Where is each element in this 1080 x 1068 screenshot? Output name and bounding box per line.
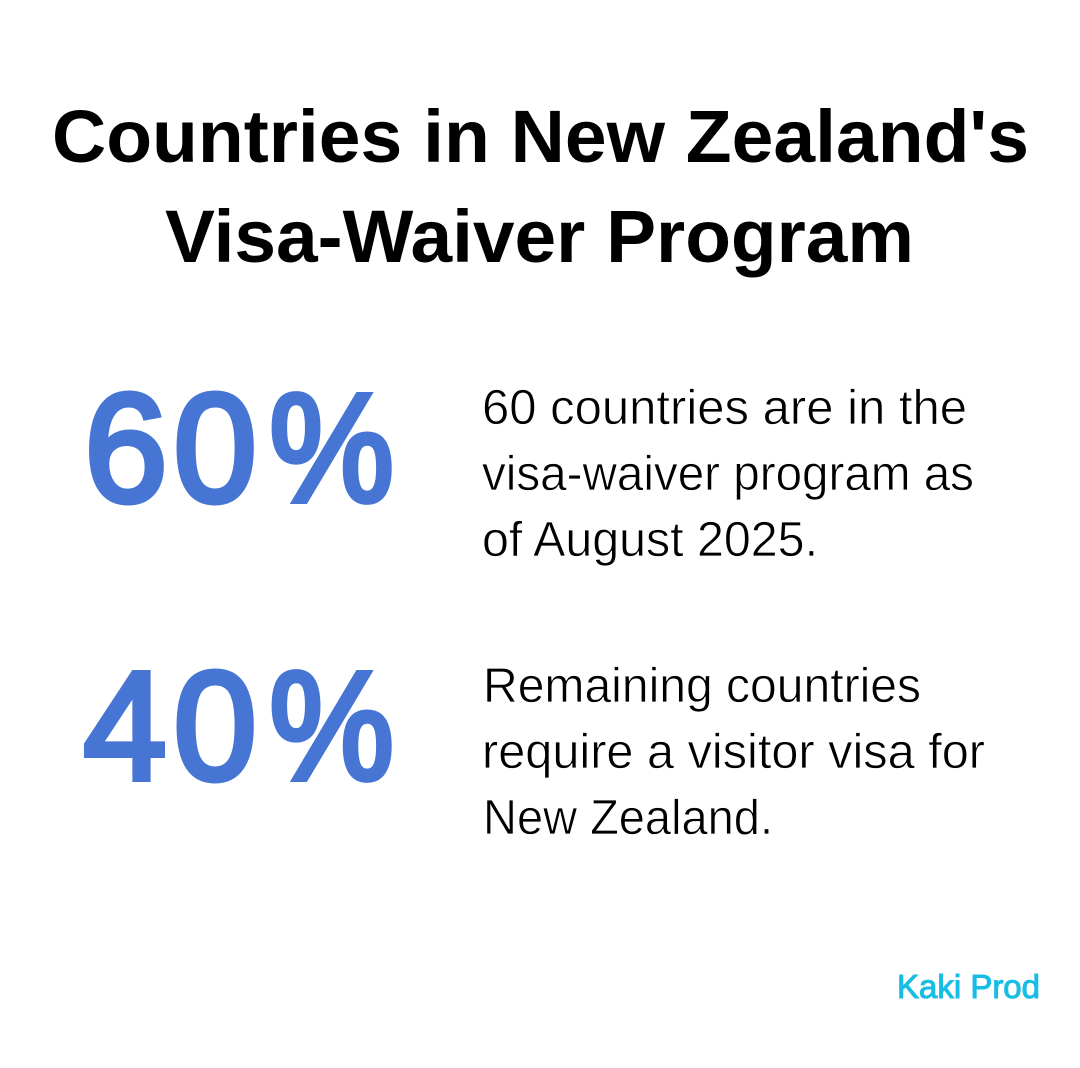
logo: Kaki Prod: Kaki Prod	[897, 968, 1040, 1005]
statistic: 60%: %	[269, 363, 394, 534]
text block: 40% description	[482, 659, 985, 845]
statistic: 60%: 60	[84, 363, 257, 534]
text block: 40% description: require a visitor visa for	[482, 725, 985, 779]
text block: 60% description: visa-waiver program as	[482, 447, 974, 501]
statistic: 40%: 40	[83, 641, 257, 812]
statistic: 40%	[83, 641, 394, 812]
text block: 60% description: 60 countries are in the	[482, 381, 967, 435]
text block: 60% description	[482, 381, 974, 567]
text block: 40% description: New Zealand.	[483, 791, 773, 845]
title	[52, 95, 1029, 278]
text block: 60% description: of August 2025.	[482, 513, 818, 567]
statistic: 60%	[84, 363, 394, 534]
statistic: 40%: %	[269, 641, 394, 812]
text block: 40% description: Remaining countries	[483, 659, 921, 713]
title: Visa-Waiver Program	[165, 195, 914, 278]
title: Countries in New Zealand's	[52, 95, 1029, 178]
